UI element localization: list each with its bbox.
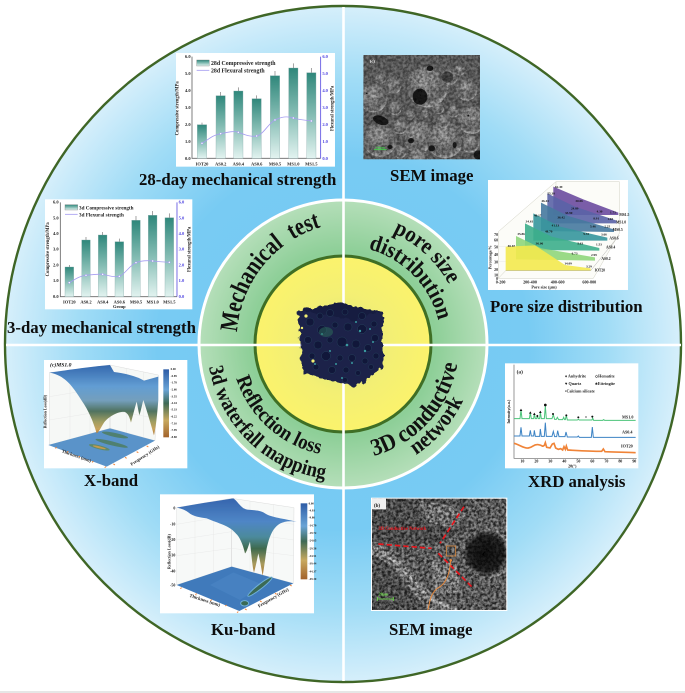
3D reflection loss surface: Ku-band: -39.44 xyxy=(309,562,317,566)
3D waterfall chart: pore size: 2.99 xyxy=(591,253,597,257)
3D reflection loss surface: X-band: Frequency (GHz) xyxy=(129,444,161,467)
bar chart: 3d strength: MS0.5 xyxy=(130,299,143,304)
3D waterfall chart: pore size: MS1.5 xyxy=(619,213,630,217)
3D reflection loss surface: X-band: -8.88 xyxy=(171,435,177,439)
3D reflection loss surface: Ku-band: -10 xyxy=(170,521,175,526)
XRD pattern chart: ♦ Anhydrite xyxy=(565,373,586,378)
bar chart: 28d strength: 3.0 xyxy=(185,105,191,110)
3D reflection loss surface: X-band: (c)MS1.0 xyxy=(50,362,72,369)
3D waterfall chart: pore size: Pore size (μm) xyxy=(531,285,557,290)
bar chart: 3d strength: AS0.6 xyxy=(114,299,126,304)
XRD pattern chart: 90 xyxy=(632,459,636,464)
bar chart: 3d strength: 5.0 xyxy=(179,215,185,220)
3D waterfall chart: pore size: AS0.6 xyxy=(609,236,619,240)
3D waterfall chart: pore size: AS0.2 xyxy=(601,257,611,261)
bar chart: 3d strength: 6.0 xyxy=(179,200,185,205)
3D waterfall chart: pore size: 36.42 xyxy=(557,215,565,219)
bar chart: 28d strength: MS0.5 xyxy=(269,161,282,166)
bar chart: 3d strength: Flexural strength/MPa xyxy=(187,226,192,272)
yellow core xyxy=(255,256,431,432)
3D waterfall chart: pore size: 46.67 xyxy=(508,244,515,248)
3D reflection loss surface: X-band: -1.78 xyxy=(171,381,177,385)
3D waterfall chart: pore size: 8.91 xyxy=(593,216,599,220)
XRD pattern chart: 20 xyxy=(534,459,538,464)
3D waterfall chart: pore size: 41.13 xyxy=(552,224,559,228)
panel: Ku-band xyxy=(160,494,317,639)
panel: 3-day mechanical strength xyxy=(7,199,197,337)
3D reflection loss surface: X-band: -7.10 xyxy=(171,421,177,425)
3D reflection loss surface: X-band: -7.99 xyxy=(171,428,177,432)
bar chart: 28d strength: 2.0 xyxy=(322,122,329,127)
title: SEM image: SEM image xyxy=(390,166,474,185)
bar chart: 28d strength xyxy=(176,53,336,167)
3D waterfall chart: pore size: 40.17 xyxy=(534,214,542,218)
3D waterfall chart: pore size: 34.61 xyxy=(526,220,533,224)
bar chart: 28d strength: 4.0 xyxy=(322,88,329,93)
3D waterfall chart: pore size: 6.73 xyxy=(572,252,578,256)
bar chart: 3d strength: 5.0 xyxy=(53,215,59,220)
3D waterfall chart: pore size: 30 xyxy=(494,260,498,264)
3D waterfall chart: pore size: 1.65 xyxy=(607,217,613,221)
title: 3-day mechanical strength: 3-day mechanical strength xyxy=(7,318,197,337)
bar chart: 28d strength: Flexural strength/MPa xyxy=(331,85,336,131)
3D waterfall chart: pore size: Percentage/% xyxy=(487,245,492,269)
3D waterfall chart: pore size: 2.25 xyxy=(604,224,610,228)
3D waterfall chart: pore size: 30.06 xyxy=(575,199,583,203)
ring label: Mechanical test: Mechanical test xyxy=(220,214,321,332)
title: Pore size distribution: Pore size distribution xyxy=(490,297,643,316)
3D reflection loss surface: X-band: -6.22 xyxy=(171,415,177,419)
bar chart: 28d strength: 6.0 xyxy=(185,54,191,59)
3D waterfall chart: pore size: 5.63 xyxy=(577,242,583,246)
bar chart: 28d strength: 4.0 xyxy=(185,88,191,93)
3D waterfall chart: pore size: 33.90 xyxy=(565,211,573,215)
3D waterfall chart: pore size: 4.30 xyxy=(597,209,603,213)
title: X-band: X-band xyxy=(84,471,139,490)
bar chart: 28d strength: 28d Flexural strength xyxy=(211,68,265,74)
3D waterfall chart: pore size: AS0.4 xyxy=(606,246,615,250)
ring label: pore size distribution: distribution xyxy=(370,236,448,320)
bar chart: 3d strength: 2.0 xyxy=(179,262,185,267)
3D waterfall chart: pore size: 70 xyxy=(494,233,498,237)
bar chart: 3d strength: 3.0 xyxy=(179,247,185,252)
bar chart: 3d strength: 4.0 xyxy=(53,231,59,236)
3D reflection loss surface: Ku-band: -50 xyxy=(170,583,175,588)
SEM micrograph with conductive network xyxy=(371,498,513,612)
bar chart: 3d strength: 3.0 xyxy=(53,247,59,252)
3D waterfall chart: pore size: 60 xyxy=(494,239,498,243)
XRD pattern chart: •Calcium silicate xyxy=(565,388,595,393)
bar chart: 3d strength: AS0.4 xyxy=(97,299,109,304)
ring label: 3D conductive network: 3D conductive xyxy=(370,363,457,456)
title: XRD analysis: XRD analysis xyxy=(528,472,626,491)
title: SEM image: SEM image xyxy=(389,620,473,639)
bar chart: 28d strength: 2.0 xyxy=(185,122,191,127)
3D reflection loss surface: X-band: -3.55 xyxy=(171,394,177,398)
bar chart: 28d strength: AS0.2 xyxy=(215,161,227,166)
3D reflection loss surface: X-band xyxy=(43,360,187,468)
SEM micrograph with conductive network: (b) xyxy=(374,504,380,509)
3D waterfall chart: pore size: 9.32 xyxy=(583,232,589,236)
3D reflection loss surface: X-band: -2.66 xyxy=(171,387,177,391)
XRD pattern chart: AS0.4 xyxy=(622,430,633,435)
bar chart: 3d strength: 6.0 xyxy=(53,200,59,205)
3D reflection loss surface: Ku-band: -49.30 xyxy=(309,577,317,581)
3D waterfall chart: pore size: MS1.0 xyxy=(616,220,626,224)
panel: X-band xyxy=(43,360,187,490)
3D reflection loss surface: X-band: -0.89 xyxy=(171,374,177,378)
bar chart: 28d strength: IOT20 xyxy=(196,161,209,166)
bar chart: 28d strength: 5.0 xyxy=(322,71,329,76)
3D waterfall chart: pore size: 14.09 xyxy=(564,262,572,266)
bar chart: 3d strength: 3d Compressive strength xyxy=(79,206,134,212)
bar chart: 3d strength: 0.0 xyxy=(179,294,185,299)
3D reflection loss surface: Ku-band: -44.37 xyxy=(309,569,317,573)
green ring xyxy=(199,200,487,488)
3D reflection loss surface: Ku-band: -19.72 xyxy=(309,531,317,535)
3D reflection loss surface: X-band: -5.33 xyxy=(171,408,177,412)
3D reflection loss surface: X-band: Reflection Loss(dB) xyxy=(43,394,48,428)
XRD pattern chart: ♥ Quartz xyxy=(565,381,581,386)
XRD pattern chart: 50 xyxy=(576,459,580,464)
3D waterfall chart: pore size: 0 xyxy=(496,277,498,281)
XRD pattern chart: 2θ(°) xyxy=(568,463,577,468)
XRD pattern chart: 30 xyxy=(548,459,552,464)
3D waterfall chart: pore size: 3.29 xyxy=(586,264,592,268)
bar chart: 3d strength: MS1.5 xyxy=(163,299,176,304)
bar chart: 28d strength: 1.0 xyxy=(322,139,329,144)
panel: 28-day mechanical strength xyxy=(139,53,337,189)
3D waterfall chart: pore size: 62.49 xyxy=(555,185,563,189)
3D waterfall chart: pore size: 24.89 xyxy=(571,206,579,210)
3D waterfall chart: pore size: 1.53 xyxy=(596,243,602,247)
bar chart: 28d strength: 3.0 xyxy=(322,105,329,110)
3D reflection loss surface: Ku-band: -20 xyxy=(170,537,175,542)
bar chart: 3d strength: 1.0 xyxy=(179,278,185,283)
bar chart: 28d strength: MS1.5 xyxy=(305,161,318,166)
central foam cube xyxy=(298,303,383,387)
3D reflection loss surface: Ku-band: Reflection Loss(dB) xyxy=(167,534,172,569)
3D reflection loss surface: Ku-band: -9.86 xyxy=(309,516,315,520)
bar chart: 3d strength: MS1.0 xyxy=(146,299,160,304)
3D reflection loss surface: Ku-band: -29.58 xyxy=(309,546,317,550)
3D reflection loss surface: Ku-band: -4.93 xyxy=(309,509,315,513)
XRD pattern chart xyxy=(505,363,638,468)
bar chart: 28d strength: 0.0 xyxy=(322,156,329,161)
XRD pattern chart: IOT20 xyxy=(621,444,633,449)
XRD pattern chart: 70 xyxy=(604,459,608,464)
bar chart: 3d strength: 4.0 xyxy=(179,231,185,236)
XRD pattern chart: 40 xyxy=(562,459,566,464)
bar chart: 3d strength: 1.0 xyxy=(53,278,59,283)
bar chart: 28d strength: 1.0 xyxy=(185,139,191,144)
bar chart: 28d strength: 0.0 xyxy=(185,156,191,161)
XRD pattern chart: Intensity(a.u.) xyxy=(506,399,511,424)
panel: pore size distribution xyxy=(487,180,643,316)
XRD pattern chart: 80 xyxy=(618,459,622,464)
3D reflection loss surface: Ku-band: -24.65 xyxy=(309,539,317,543)
ring label: 3D conductive network: network xyxy=(410,396,464,455)
3D waterfall chart: pore size: 3.66 xyxy=(601,233,607,237)
bar chart: 28d strength: MS1.0 xyxy=(287,161,300,166)
3D waterfall chart: pore size xyxy=(487,180,630,290)
SEM micrograph of pores: (c) xyxy=(370,59,375,64)
bar chart: 3d strength: Compressive strength/MPa xyxy=(46,222,51,276)
XRD pattern chart: MS1.0 xyxy=(622,415,633,420)
panel: XRD analysis xyxy=(505,363,638,491)
3D waterfall chart: pore size: 50 xyxy=(494,246,498,250)
XRD pattern chart: ♣Ettringite xyxy=(595,381,615,386)
3D reflection loss surface: Ku-band: -30 xyxy=(170,553,175,558)
3D waterfall chart: pore size: 600-800 xyxy=(582,279,596,284)
XRD pattern chart: 10 xyxy=(520,459,524,464)
bar chart: 3d strength xyxy=(45,199,192,309)
SEM micrograph of pores: 200μm xyxy=(375,146,385,150)
3D waterfall chart: pore size: 55.38 xyxy=(547,192,555,196)
bar chart: 28d strength: 5.0 xyxy=(185,71,191,76)
XRD pattern chart: 60 xyxy=(590,459,594,464)
XRD pattern chart: ◇Hematite xyxy=(594,373,615,378)
3D waterfall chart: pore size: 0-200 xyxy=(496,279,506,284)
panel: SEM image top xyxy=(359,55,486,185)
3D reflection loss surface: X-band: Thickness (mm) xyxy=(61,449,92,463)
XRD pattern chart: (a) xyxy=(517,369,523,376)
bar chart: 3d strength: 0.0 xyxy=(53,294,59,299)
title: 28-day mechanical strength: 28-day mechanical strength xyxy=(139,170,337,189)
3D waterfall chart: pore size: 10 xyxy=(494,274,498,278)
ring label: reflection loss 3d waterfall mapping: Reflection loss xyxy=(236,374,322,454)
3D waterfall chart: pore size: 48.70 xyxy=(545,230,553,234)
3D waterfall chart: pore size: 1.73 xyxy=(610,211,616,215)
3D reflection loss surface: Ku-band: -34.51 xyxy=(309,554,317,558)
3D reflection loss surface: Ku-band: Frequency (GHz) xyxy=(257,587,290,609)
3D reflection loss surface: X-band: -4.44 xyxy=(171,401,177,405)
3D reflection loss surface: Ku-band: -14.79 xyxy=(309,523,317,527)
panel: SEM image bottom xyxy=(371,498,513,639)
bar chart: 28d strength: 6.0 xyxy=(322,54,329,59)
3D waterfall chart: pore size: 35.86 xyxy=(517,232,525,236)
SEM micrograph with conductive network: 20μm xyxy=(379,591,389,596)
ring label: pore size distribution: pore size xyxy=(390,223,457,284)
3D reflection loss surface: Ku-band: Thickness (mm) xyxy=(189,594,221,609)
SEM micrograph of pores xyxy=(363,55,480,160)
title: Ku-band: Ku-band xyxy=(211,620,276,639)
bar chart: 28d strength: 28d Compressive strength xyxy=(211,61,276,67)
ring label: reflection loss 3d waterfall mapping: 3d waterfall mapping xyxy=(209,365,326,483)
bar chart: 3d strength: AS0.2 xyxy=(80,299,92,304)
SEM micrograph with conductive network: 3D Conductive Network xyxy=(378,527,427,532)
3D waterfall chart: pore size: 200-400 xyxy=(523,279,537,284)
3D waterfall chart: pore size: 36.06 xyxy=(536,241,543,245)
bottom page rule xyxy=(0,691,685,693)
3D waterfall chart: pore size: 400-600 xyxy=(551,279,565,284)
bar chart: 28d strength: AS0.6 xyxy=(251,161,263,166)
bar chart: 3d strength: Group xyxy=(113,304,126,309)
3D waterfall chart: pore size: MS0.5 xyxy=(613,228,623,232)
3D reflection loss surface: Ku-band: -40 xyxy=(170,568,175,573)
3D waterfall chart: pore size: 20 xyxy=(494,268,498,272)
3D reflection loss surface: Ku-band xyxy=(160,494,317,613)
bar chart: 28d strength: AS0.4 xyxy=(233,161,245,166)
3D waterfall chart: pore size: 5.46 xyxy=(590,225,596,229)
bar chart: 3d strength: IOT20 xyxy=(63,299,76,304)
3D reflection loss surface: X-band: 0.00 xyxy=(171,367,176,371)
3D reflection loss surface: Ku-band: 0 xyxy=(173,505,175,510)
3D waterfall chart: pore size: 46.43 xyxy=(541,199,549,203)
3D waterfall chart: pore size: IOT20 xyxy=(595,269,605,273)
bar chart: 3d strength: 2.0 xyxy=(53,262,59,267)
3D reflection loss surface: Ku-band: 0.00 xyxy=(309,501,314,505)
bar chart: 28d strength: Compressive strength/MPa xyxy=(176,81,181,135)
3D waterfall chart: pore size: 40 xyxy=(494,253,498,257)
bar chart: 3d strength: 3d Flexural strength xyxy=(79,212,124,218)
